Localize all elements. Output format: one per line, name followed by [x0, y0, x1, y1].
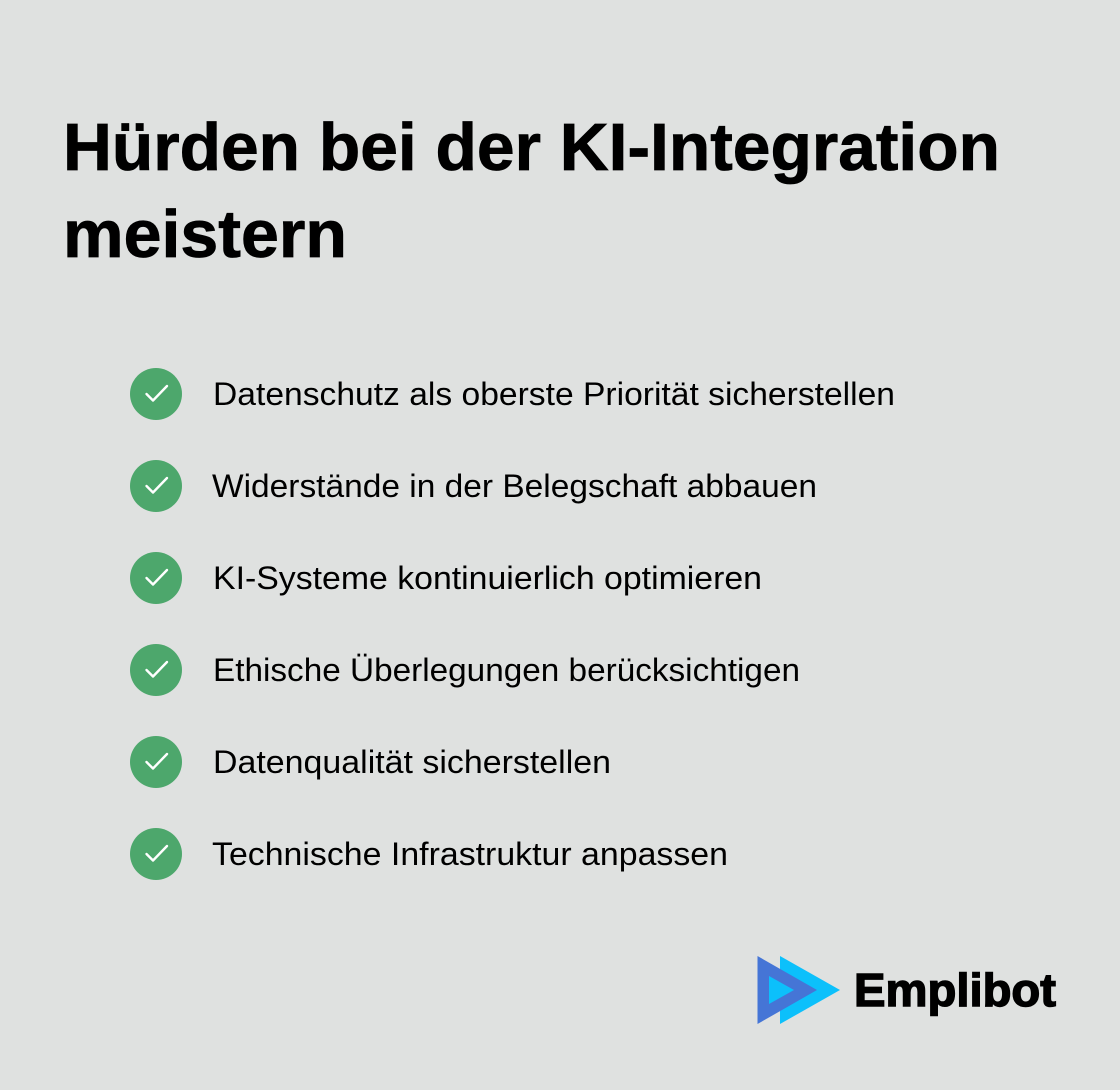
item: KI-Systeme	[130, 552, 762, 604]
item: Ethische Überlegungen	[130, 644, 800, 696]
logo: Emplibot: Emplibot	[854, 964, 1056, 1016]
title	[63, 110, 1000, 272]
item: Widerstände	[130, 460, 817, 512]
item: Widerstände: Widerstände in der Belegschaft abbauen	[212, 468, 817, 504]
item: Ethische Überlegungen: Ethische Überlegungen berücksichtigen	[213, 652, 800, 688]
item: Technische Infrastruktur: Technische Infrastruktur anpassen	[212, 836, 728, 872]
title: Hürden bei der KI-Integration	[63, 110, 1000, 185]
item: Datenqualität	[130, 736, 611, 788]
item: Technische Infrastruktur	[130, 828, 728, 880]
title: meistern	[63, 197, 347, 272]
item: KI-Systeme: KI-Systeme kontinuierlich optimieren	[213, 560, 762, 596]
item: Datenschutz: Datenschutz als oberste Priorität sicherstellen	[213, 376, 895, 412]
item: Datenqualität: Datenqualität sicherstellen	[213, 744, 611, 780]
checklist	[130, 368, 895, 880]
item: Datenschutz	[130, 368, 895, 420]
logo: Emplibot	[758, 956, 1056, 1024]
